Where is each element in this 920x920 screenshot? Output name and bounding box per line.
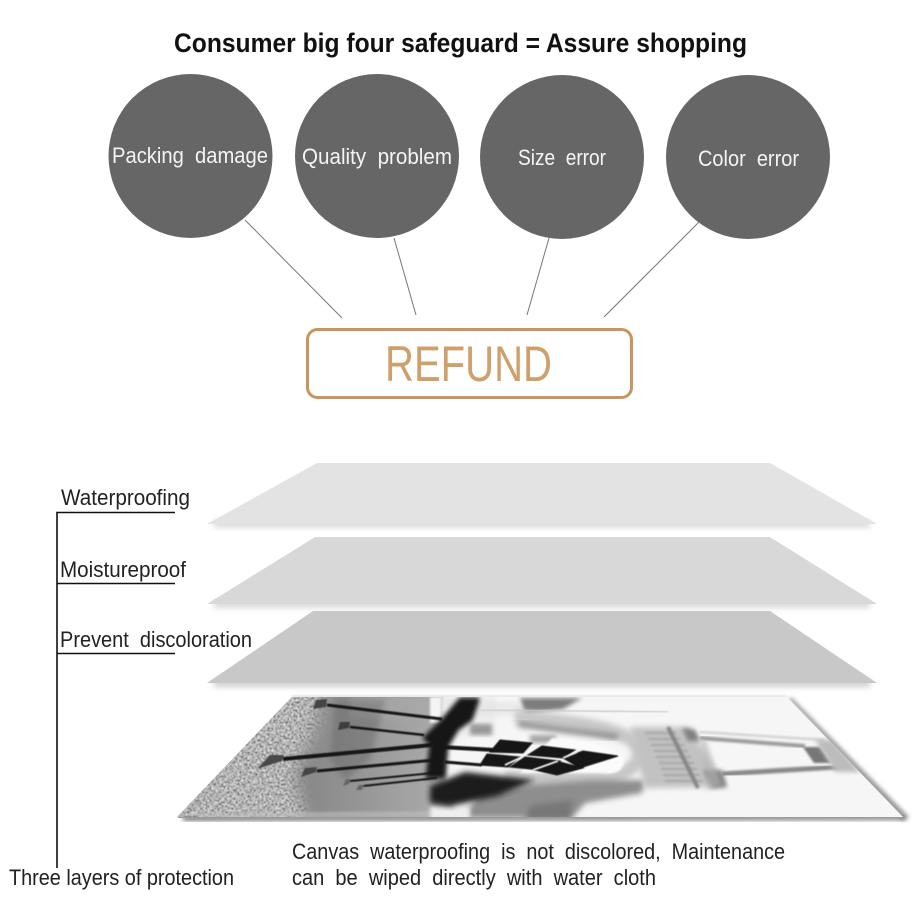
tower column: [630, 727, 725, 788]
circle: size error: [480, 75, 644, 239]
connector lines to refund: [245, 220, 699, 318]
photo shadow: [183, 695, 909, 821]
photo image: [177, 697, 903, 817]
circle: color error: Color error: [698, 146, 799, 171]
slat highlights: [505, 752, 577, 770]
circle: color error: [666, 75, 830, 239]
label: three layers of protection: Three layers of protection: [9, 865, 234, 890]
seat slats: [490, 740, 532, 753]
arch opening: [520, 738, 624, 774]
layer: moistureproof sheet: [207, 537, 877, 608]
label: prevent discoloration: Prevent discoloration: [60, 627, 252, 652]
caption: can be wiped directly with water cloth: [292, 865, 656, 890]
layer: discoloration sheet: [207, 611, 877, 687]
trees: [520, 698, 582, 714]
caption: [292, 839, 785, 890]
arch ring: [505, 716, 639, 778]
bench shadow: [430, 772, 535, 806]
refund box: [308, 330, 632, 398]
circle: quality problem: [295, 74, 459, 238]
circle: packing damage: [108, 74, 272, 238]
bracket lines: [57, 512, 175, 868]
photo bottom edge: [178, 816, 903, 818]
caption: Canvas waterproofing is not discolored, Maintenance: [292, 839, 785, 864]
layer: waterproofing sheet: [207, 463, 877, 528]
tower upper legs: [700, 732, 825, 740]
ground: [177, 697, 455, 817]
title: Consumer big four safeguard = Assure shopping: [174, 28, 747, 58]
feet: [313, 699, 327, 709]
bottom strip: [196, 811, 428, 817]
circle: packing damage: Packing damage: [112, 143, 268, 168]
label: waterproofing: Waterproofing: [61, 485, 190, 510]
tower lower gray mass: [460, 780, 645, 818]
refund box: REFUND: [385, 336, 552, 392]
label: moistureproof: Moistureproof: [60, 557, 187, 582]
circle: quality problem: Quality problem: [302, 144, 452, 169]
circle: size error: Size error: [518, 145, 606, 170]
photo: bench and Eiffel tower canvas: [170, 690, 915, 830]
bench frame: [257, 698, 618, 790]
